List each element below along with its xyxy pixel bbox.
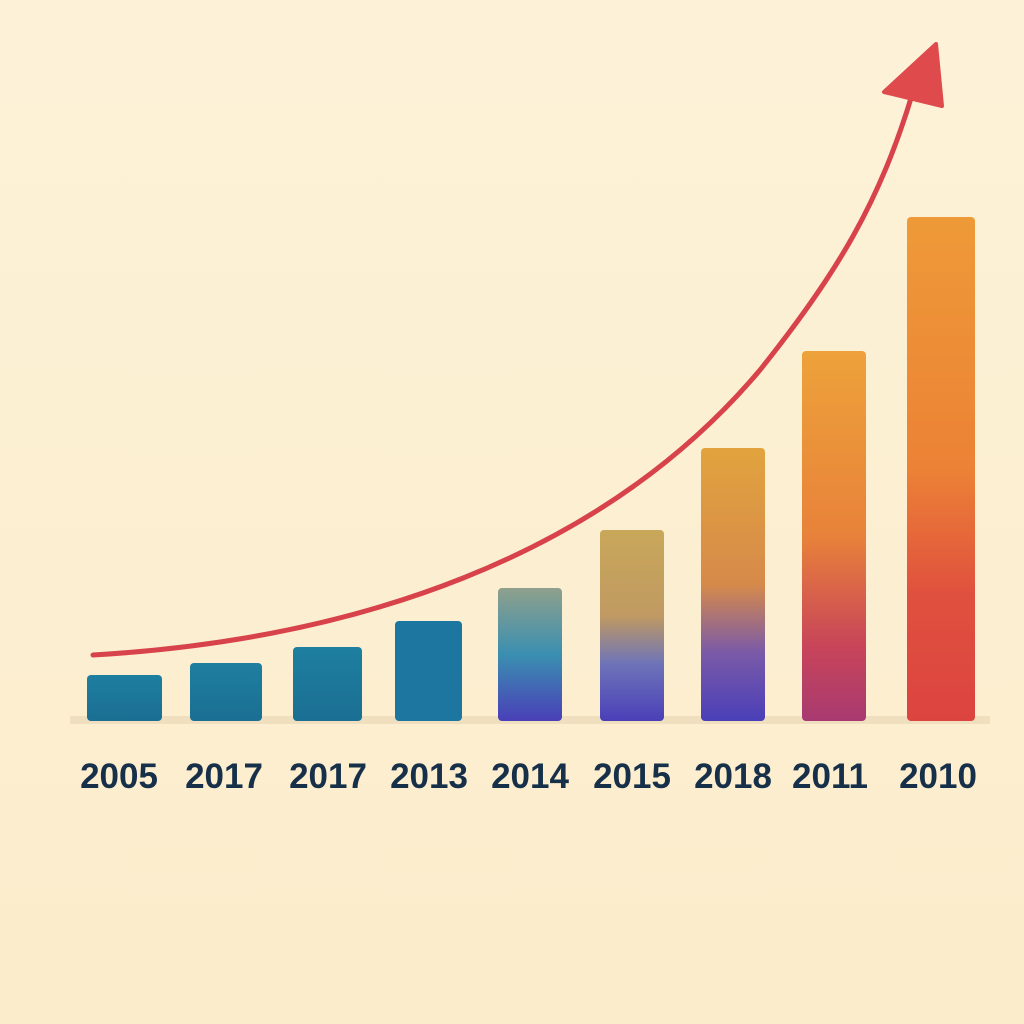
year labels: 2014 (491, 757, 569, 796)
baseline shadow (70, 716, 990, 724)
bars (87, 217, 975, 721)
year labels: 2017 (289, 757, 367, 796)
year labels (80, 757, 977, 796)
year labels: 2015 (593, 757, 671, 796)
arrow: trend line (93, 44, 942, 655)
year labels: 2017 (185, 757, 263, 796)
year labels: 2013 (390, 757, 468, 796)
year labels: 2011 (792, 757, 868, 796)
year labels: 2010 (899, 757, 977, 796)
year labels: 2005 (80, 757, 158, 796)
year labels: 2018 (694, 757, 772, 796)
